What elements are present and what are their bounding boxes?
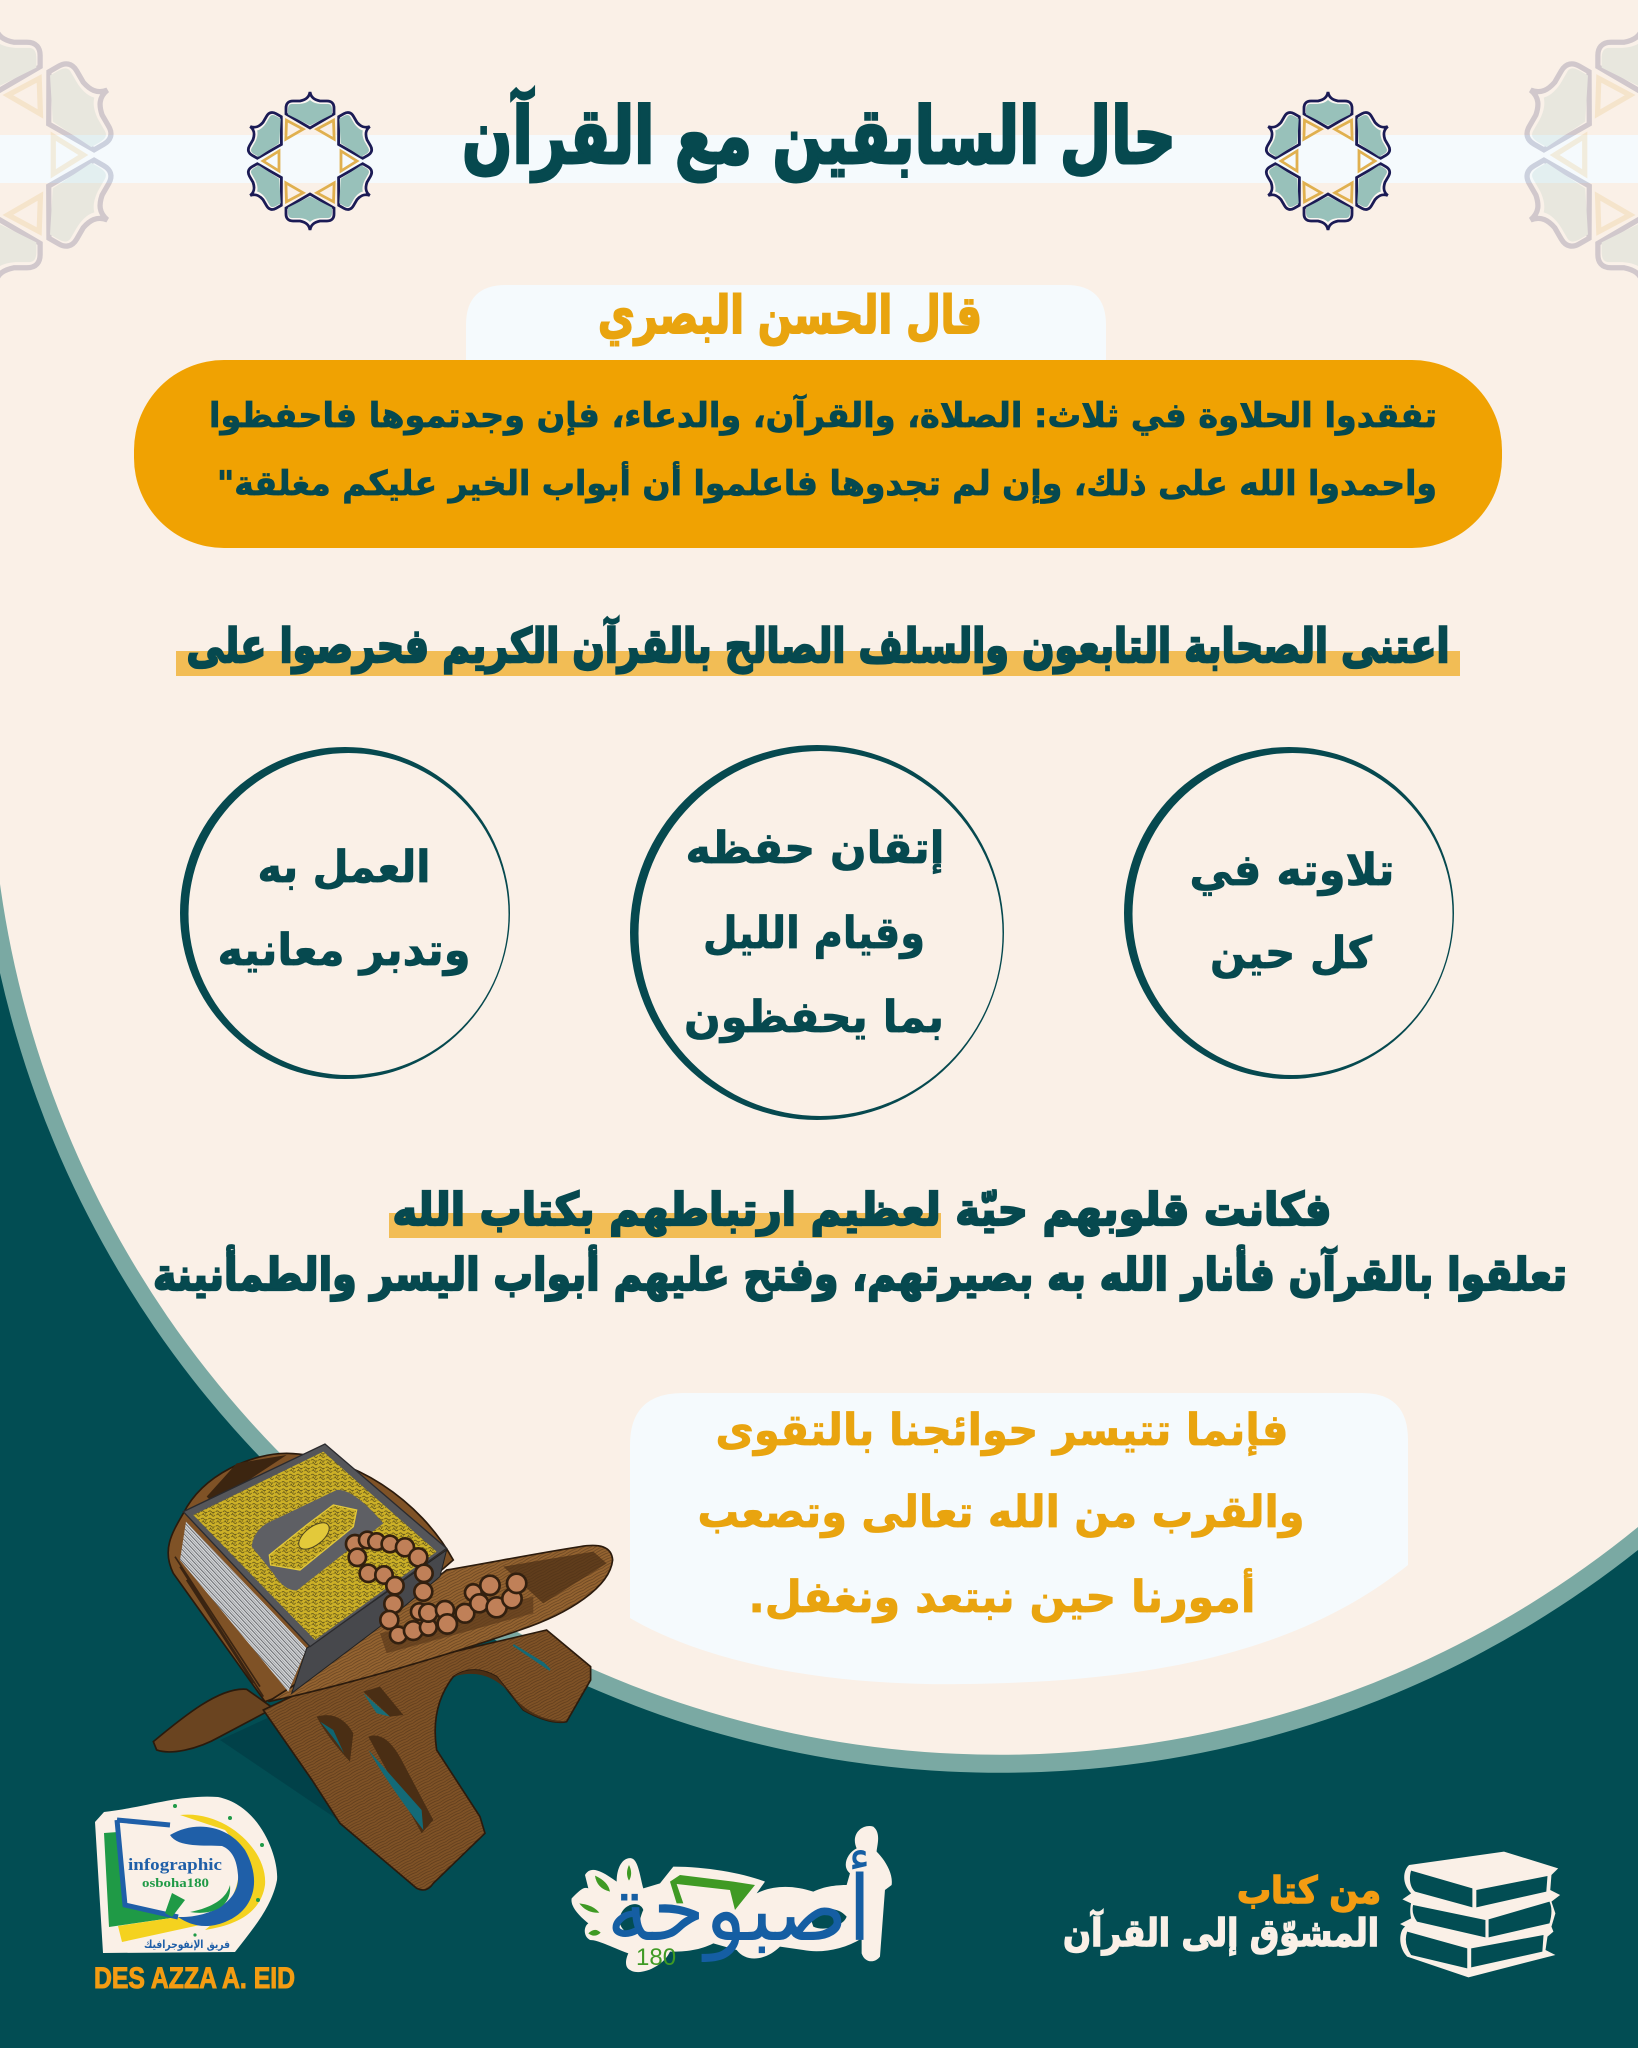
book source [1063, 1852, 1560, 1977]
title band [0, 135, 1638, 183]
circle: practice: العمل به [258, 842, 430, 893]
sticker backing [571, 1826, 892, 1972]
section heading [176, 616, 1460, 676]
right rosette icon [1245, 86, 1411, 236]
title: حال السابقين مع القرآن [462, 88, 1176, 182]
yellow page [118, 1917, 200, 1942]
dark teal footer area [0, 973, 1638, 2048]
logo: infographic team [95, 1797, 277, 1953]
circle: recitation [1124, 747, 1454, 1079]
sticker base [95, 1797, 277, 1953]
body line one: فكانت قلوبهم حيّة لعظيم ارتباطهم بكتاب الله [392, 1183, 1332, 1236]
panel: hasan al-basri quote [134, 285, 1502, 548]
icon: quran on wooden stand [153, 1444, 613, 1890]
panel: closing message [630, 1393, 1408, 1684]
logo wordmark: أصبوحة [606, 1850, 872, 1962]
book mark [670, 1875, 755, 1910]
circle: recitation: كل حين [1210, 928, 1372, 979]
circle: memorization: بما يحفظون [684, 992, 944, 1043]
curved light teal band [0, 884, 1638, 2048]
green wave accent [190, 1885, 230, 1913]
panel: closing message: والقرب من الله تعالى وتصعب [698, 1487, 1304, 1538]
orange pill [134, 360, 1502, 548]
team name text: infographic [128, 1855, 223, 1874]
blue wave [170, 1827, 254, 1926]
icon: pen nib [165, 1893, 185, 1917]
circle: practice: وتدبر معانيه [218, 925, 470, 976]
body text [153, 1183, 1567, 1301]
tab behind heading [466, 285, 1106, 362]
logo: infographic team: osboha180 [142, 1875, 209, 1890]
icon: stack of books [1400, 1852, 1560, 1977]
leaves [579, 1865, 631, 1936]
source label: من كتاب [1237, 1869, 1381, 1912]
circle: memorization: إتقان حفظه [686, 823, 944, 874]
quote heading: قال الحسن البصري [598, 286, 982, 346]
book title: المشوّق إلى القرآن [1063, 1909, 1379, 1956]
panel: closing message: فإنما تتيسر حوائجنا بالتقوى [716, 1405, 1288, 1456]
circle: memorization: وقيام الليل [703, 908, 925, 959]
quote line one: تفقدوا الحلاوة في ثلاث: الصلاة، والقرآن، والدعاء، فإن وجدتموها فاحفظوا [209, 394, 1437, 436]
circle: memorization [630, 745, 1004, 1120]
panel: closing message: أمورنا حين نبتعد ونغفل. [748, 1568, 1256, 1623]
circle: practice [180, 747, 510, 1079]
circle: recitation: تلاوته في [1190, 845, 1394, 896]
designer credit: DES AZZA A. EID [94, 1962, 295, 1995]
logo: asbuha 180 [571, 1826, 892, 1972]
number 180: 180 [636, 1944, 676, 1971]
highlight bar [176, 651, 1460, 676]
counters [620, 1904, 847, 1933]
highlight bar [389, 1213, 941, 1238]
yellow splash [180, 1815, 265, 1930]
logo: infographic team: فريق الإنفوجرافيك [144, 1938, 230, 1951]
left side ornament [0, 14, 152, 296]
right side ornament [1486, 14, 1638, 296]
dots [173, 1804, 264, 1937]
green page [104, 1832, 178, 1927]
left rosette icon [227, 86, 393, 236]
quote line two: واحمدوا الله على ذلك، وإن لم تجدوها فاعلموا أن أبواب الخير عليكم مغلقة" [217, 461, 1437, 504]
blue book outline [117, 1820, 178, 1917]
